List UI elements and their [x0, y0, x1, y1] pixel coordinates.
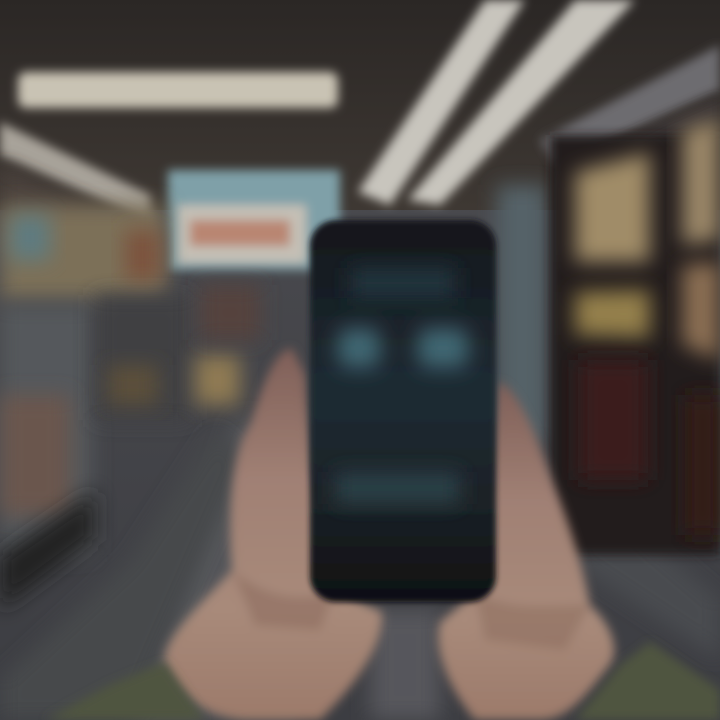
phone screen glow [335, 268, 468, 504]
ceiling lights [0, 0, 720, 280]
icon: left sleeve [45, 662, 205, 720]
left shelves [0, 205, 260, 610]
icon: smartphone [310, 220, 496, 602]
icon: right hand [438, 382, 614, 720]
icon: right sleeve [575, 642, 720, 720]
store sign [168, 170, 340, 270]
icon: left hand [165, 348, 382, 720]
right shelves [497, 118, 720, 555]
